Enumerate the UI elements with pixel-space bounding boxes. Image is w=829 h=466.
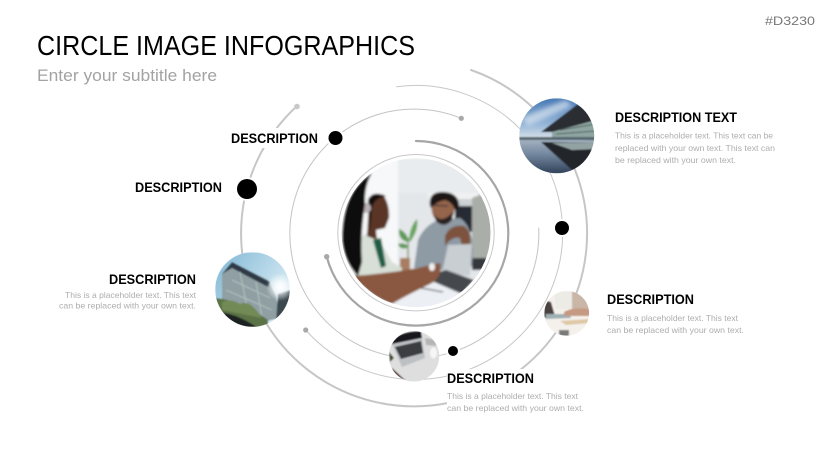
dot: second ring end xyxy=(459,116,464,121)
subtitle: Enter your subtitle here xyxy=(37,66,217,85)
title: CIRCLE IMAGE INFOGRAPHICS xyxy=(37,30,415,61)
marker halo 1 xyxy=(326,129,344,147)
marker halo 4 xyxy=(446,344,460,358)
forearm xyxy=(352,263,441,304)
marker dot 2 xyxy=(237,179,257,199)
label: description upper left: DESCRIPTION xyxy=(135,180,222,195)
text block: left xyxy=(59,272,197,310)
label text: DESCRIPTION xyxy=(231,131,318,146)
desk xyxy=(394,280,460,306)
third ring xyxy=(306,85,563,379)
product code: #D3230 xyxy=(765,14,815,28)
plant xyxy=(407,238,409,262)
woman face xyxy=(367,196,389,240)
label background xyxy=(229,128,321,148)
man xyxy=(414,218,473,270)
dot: inner ring end xyxy=(324,254,329,259)
marker halo 3 xyxy=(553,219,571,237)
body text: can be replaced with your own text. xyxy=(59,300,196,310)
text block: right xyxy=(607,292,744,335)
text block: bottom xyxy=(447,369,589,416)
second ring xyxy=(290,109,539,358)
body text xyxy=(447,391,584,413)
photo: glass building reflected in water xyxy=(519,98,596,174)
photo: office tower with sun flare xyxy=(215,252,294,330)
body text: can be replaced with your own text. xyxy=(447,403,584,413)
outer ring xyxy=(241,70,587,406)
dot: third ring end xyxy=(303,327,308,333)
body text xyxy=(615,130,775,165)
photo: laptop on white desk xyxy=(388,330,441,383)
body text: This is a placeholder text. This text can be xyxy=(615,130,773,140)
body text xyxy=(59,290,197,310)
body text: This is a placeholder text. This text xyxy=(65,290,197,300)
body text: can be replaced with your own text. xyxy=(607,325,744,335)
ring around central photo xyxy=(338,154,494,311)
dot: outer ring end xyxy=(294,104,300,109)
laptop xyxy=(442,244,472,276)
woman body xyxy=(354,234,404,277)
inner thick ring xyxy=(327,141,508,326)
marker halo 2 xyxy=(235,177,259,201)
small ring end dots xyxy=(294,104,464,333)
heading: DESCRIPTION xyxy=(447,371,534,386)
label: description top centre xyxy=(229,128,321,148)
block background xyxy=(447,369,589,416)
marker dot 1 xyxy=(328,131,342,145)
woman long hair xyxy=(342,173,372,276)
body text: replaced with your own text. This text can xyxy=(615,143,775,153)
photo: hands on a tablet at a desk xyxy=(544,291,590,336)
marker dot 4 xyxy=(448,346,458,356)
heading: DESCRIPTION xyxy=(109,272,196,287)
body text: be replaced with your own text. xyxy=(615,155,736,165)
heading: DESCRIPTION TEXT xyxy=(615,110,738,125)
black marker dots xyxy=(235,129,571,358)
orbit rings xyxy=(241,70,587,406)
body text: This is a placeholder text. This text xyxy=(447,391,579,401)
heading: DESCRIPTION xyxy=(607,292,694,307)
body text xyxy=(607,313,744,335)
central photo: two colleagues at a desk xyxy=(340,158,492,310)
text block: top right xyxy=(615,110,775,165)
body text: This is a placeholder text. This text xyxy=(607,313,739,323)
marker dot 3 xyxy=(555,221,569,235)
